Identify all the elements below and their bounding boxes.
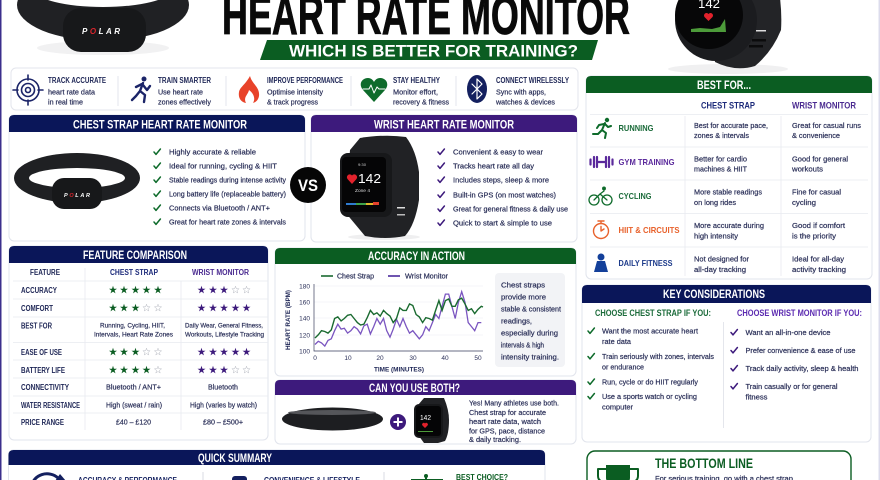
callout: chart note: Chest straps <box>501 280 545 290</box>
callout: chart note: stable & consistent <box>501 304 561 314</box>
column: choose chest strap: rate data <box>602 337 632 346</box>
column: choose wrist monitor: Want an all-in-one device <box>746 328 830 337</box>
list: wrist monitor features: Tracks heart rate all day <box>453 162 534 170</box>
list: wrist monitor features: Convenient & easy to wear <box>453 148 544 156</box>
image: wrist watch: 142 <box>358 171 381 186</box>
benefit: stay healthy: Monitor effort, <box>393 88 438 96</box>
image: chest strap: P O LAR <box>64 193 90 199</box>
image: strap <box>282 408 383 430</box>
benefit: track accurate: TRACK ACCURATE <box>48 76 107 85</box>
image: small watch: 142 <box>420 413 431 422</box>
row: connectivity: Bluetooth / ANT+ <box>106 382 161 392</box>
column: choose chest strap: Use a sports watch or cycling <box>602 392 697 401</box>
row: gym training: machines & HIIT <box>694 164 747 174</box>
icon: runner <box>132 76 150 102</box>
icon: runner <box>593 118 611 138</box>
column: choose chest strap: Train seriously with zones, intervals <box>602 352 714 361</box>
list: wrist monitor features <box>438 148 568 228</box>
row: hiit and circuits: HIIT & CIRCUITS <box>618 225 680 235</box>
row: water resistance: High (sweat / rain) <box>106 400 162 410</box>
row: best for: Intervals, Heart Rate Zones <box>94 332 174 338</box>
callout: chart note: intervals & high <box>501 340 544 350</box>
icon: flame <box>239 76 259 103</box>
row: cycling: Fine for casual <box>792 188 841 196</box>
hero image: chest strap: P O LAR <box>82 27 120 36</box>
list: wrist monitor features: Great for general fitness & daily use <box>453 204 568 214</box>
panel: best for <box>586 76 872 279</box>
image: small watch <box>414 398 449 443</box>
line chart: heart rate over time: HEART RATE (BPM) <box>285 290 292 350</box>
row: hiit and circuits: high intensity <box>694 232 738 240</box>
icon: person <box>594 254 608 272</box>
table header: CHEST STRAP <box>110 268 159 277</box>
row: running: Great for casual runs <box>792 121 861 130</box>
benefit: connect wirelessly: watches & devices <box>495 98 555 106</box>
panel: wrist monitor: WRIST HEART RATE MONITOR <box>374 117 514 131</box>
icon: trophy <box>598 465 638 480</box>
benefit: track accurate <box>13 75 107 106</box>
row: running: Best for accurate pace, <box>694 121 768 130</box>
line chart: heart rate over time <box>285 284 483 374</box>
benefit: stay healthy: STAY HEALTHY <box>393 76 441 85</box>
line chart: heart rate over time: 120 <box>299 332 310 340</box>
row: comfort <box>21 304 250 313</box>
benefit: train smarter: TRAIN SMARTER <box>158 76 211 85</box>
row: gym training: Good for general <box>792 154 848 164</box>
list: wrist monitor features: Quick to start & simple to use <box>453 218 552 228</box>
icon: bluetooth <box>467 75 487 103</box>
row: hiit and circuits: Good if comfort <box>792 221 845 230</box>
row: daily fitness: Ideal for all-day <box>792 254 844 264</box>
list: wrist monitor features: Built-in GPS (on most watches) <box>453 190 556 200</box>
line chart: heart rate over time: 140 <box>299 316 310 322</box>
column headers: WRIST MONITOR <box>792 100 856 112</box>
row: running: zones & intervals <box>694 131 749 140</box>
panel: the bottom line: THE BOTTOM LINE <box>655 455 753 471</box>
column: choose wrist monitor: fitness <box>746 392 768 402</box>
line chart: heart rate over time: 180 <box>299 284 310 290</box>
list: chest strap features: Ideal for running, cycling & HIIT <box>169 162 278 170</box>
row: daily fitness <box>594 254 846 274</box>
benefit: track accurate: in real time <box>48 98 83 106</box>
panel: feature comparison: FEATURE COMPARISON <box>83 248 187 262</box>
panel: wrist monitor <box>311 115 577 242</box>
row: accuracy <box>21 286 250 295</box>
row: water resistance: High (varies by watch) <box>190 400 257 410</box>
text: use both: Chest strap for accurate <box>469 408 546 417</box>
benefit: connect wirelessly: Sync with apps, <box>496 88 546 96</box>
image: chest strap <box>14 153 140 209</box>
benefit: train smarter: Use heart rate <box>158 88 203 96</box>
row: daily fitness: activity tracking <box>792 265 846 274</box>
row: running <box>593 118 861 140</box>
badge: VS <box>290 167 326 203</box>
list: wrist monitor features: Includes steps, sleep & more <box>453 176 549 184</box>
row: ease of use <box>21 348 250 357</box>
benefit: improve performance: & track progress <box>267 98 318 106</box>
table header <box>30 268 249 277</box>
column: choose chest strap: Run, cycle or do HIIT regularly <box>602 378 698 386</box>
panel: chest strap <box>9 115 305 241</box>
text: use both: for GPS, pace, distance <box>469 426 545 436</box>
row: battery life <box>21 366 250 375</box>
benefit: track accurate: heart rate data <box>48 88 96 96</box>
benefit: stay healthy: recovery & fitness <box>393 98 449 106</box>
icon: stopwatch <box>594 221 608 238</box>
row: price range: £80 – £500+ <box>203 418 243 426</box>
row: cycling: More stable readings <box>694 188 762 196</box>
panel: accuracy in action: ACCURACY IN ACTION <box>368 249 465 263</box>
row: battery life: BATTERY LIFE <box>21 366 66 375</box>
benefits strip <box>11 68 578 110</box>
text: use both <box>469 398 559 444</box>
subtitle banner: WHICH IS BETTER FOR TRAINING? <box>289 42 578 60</box>
text: use both: Yes! Many athletes use both. <box>469 398 559 408</box>
row: gym training <box>590 154 848 174</box>
text: use both: & daily tracking. <box>469 435 521 444</box>
column: choose chest strap <box>588 308 714 412</box>
badge: VS: VS <box>298 176 318 195</box>
row: best for: Running, Cycling, HIIT, <box>100 322 165 330</box>
column: choose chest strap: CHOOSE CHEST STRAP IF YOU: <box>595 308 711 318</box>
line chart: heart rate over time: 50 <box>474 355 482 362</box>
row: daily fitness: all-day tracking <box>694 265 746 274</box>
callout: chart note: especially during <box>501 328 558 338</box>
benefit: improve performance: IMPROVE PERFORMANCE <box>267 76 343 85</box>
panel: the bottom line <box>587 451 851 480</box>
line chart: heart rate over time: 0 <box>313 355 317 362</box>
image: wrist watch: Zone 4 <box>355 188 371 193</box>
table header: FEATURE <box>30 268 61 277</box>
row: running: & convenience <box>792 131 840 140</box>
summary: convenience and lifestyle <box>232 476 361 480</box>
icon: dumbbell <box>590 157 612 167</box>
panel: can you use both <box>275 380 576 444</box>
panel: quick summary <box>8 450 545 480</box>
list: chest strap features: Great for heart rate zones & intervals <box>169 218 286 226</box>
row: connectivity: CONNECTIVITY <box>21 383 70 392</box>
row: comfort: COMFORT <box>21 304 53 313</box>
benefit: stay healthy <box>361 76 449 106</box>
callout: chart note <box>495 273 565 367</box>
column: choose chest strap: computer <box>602 402 634 412</box>
chart legend <box>321 272 449 280</box>
line chart: heart rate over time: TIME (MINUTES) <box>374 366 424 374</box>
benefit: improve performance <box>239 76 343 106</box>
row: hiit and circuits <box>594 221 845 240</box>
column: choose wrist monitor: Train casually or for general <box>746 382 838 391</box>
line chart: heart rate over time: 30 <box>409 355 417 362</box>
benefit: connect wirelessly <box>467 75 570 106</box>
row: connectivity <box>21 382 238 392</box>
panel: can you use both: CAN YOU USE BOTH? <box>369 381 460 395</box>
image: wrist watch: 9:30 <box>358 163 366 167</box>
column: choose chest strap: or endurance <box>602 362 644 372</box>
column: choose wrist monitor: Prefer convenience & ease of use <box>746 346 856 355</box>
column: choose wrist monitor <box>731 308 862 402</box>
row: best for: Workouts, Lifestyle Tracking <box>185 332 264 338</box>
callout: chart note: provide more <box>501 292 546 302</box>
row: cycling <box>589 187 841 207</box>
row: gym training: GYM TRAINING <box>618 157 675 167</box>
icon: heart <box>361 78 387 102</box>
row: price range: £40 – £120 <box>116 418 151 426</box>
panel: chest strap: CHEST STRAP HEART RATE MONITOR <box>73 117 247 131</box>
row: price range <box>21 418 243 427</box>
row: cycling: CYCLING <box>618 191 652 201</box>
list: chest strap features: Long battery life (replaceable battery) <box>169 190 286 198</box>
line chart: heart rate over time: 10 <box>344 355 352 362</box>
table header: WRIST MONITOR <box>192 268 249 277</box>
row: gym training: workouts <box>791 164 823 174</box>
column headers: CHEST STRAP <box>701 100 756 112</box>
benefit: train smarter <box>132 76 211 106</box>
column headers <box>701 100 856 112</box>
panel: quick summary: QUICK SUMMARY <box>198 451 272 465</box>
row: best for: BEST FOR <box>21 322 52 330</box>
row: water resistance <box>21 400 257 410</box>
line chart: heart rate over time: 20 <box>376 355 384 362</box>
summary: best choice <box>411 473 508 480</box>
benefit: connect wirelessly: CONNECT WIRELESSLY <box>496 76 570 85</box>
line chart: heart rate over time: 100 <box>299 348 310 356</box>
list: chest strap features: Highly accurate & reliable <box>169 148 256 156</box>
panel: key considerations <box>582 285 871 442</box>
hero image: wrist watch <box>668 0 788 74</box>
row: gym training: Better for cardio <box>694 154 747 164</box>
chart legend: Chest Strap <box>337 272 374 280</box>
panel: feature comparison <box>9 246 268 440</box>
icon: plus <box>390 414 406 430</box>
row: accuracy: ACCURACY <box>21 286 58 295</box>
benefit: train smarter: zones effectively <box>158 98 211 106</box>
row: ease of use: EASE OF USE <box>21 348 63 357</box>
row: best for <box>21 322 264 338</box>
row: cycling: cycling <box>792 198 816 207</box>
line chart: heart rate over time: 160 <box>299 300 310 306</box>
list: chest strap features <box>154 148 286 226</box>
row: cycling: on long rides <box>694 198 736 207</box>
text: use both: heart rate data, watch <box>469 417 541 426</box>
chart legend: Wrist Monitor <box>405 272 449 280</box>
row: connectivity: Bluetooth <box>208 382 238 392</box>
callout: chart note: intensity training. <box>501 352 559 362</box>
column: choose wrist monitor: Track daily activity, sleep & health <box>746 364 858 373</box>
row: daily fitness: Not designed for <box>694 254 750 264</box>
row: water resistance: WATER RESISTANCE <box>21 401 80 410</box>
panel: key considerations: KEY CONSIDERATIONS <box>663 287 765 301</box>
benefit: improve performance: Optimise intensity <box>267 88 323 96</box>
row: hiit and circuits: More accurate during <box>694 221 764 230</box>
list: chest strap features: Connects via Bluetooth / ANT+ <box>169 204 270 212</box>
hero image: chest strap <box>17 0 189 55</box>
panel: accuracy in action <box>275 248 576 376</box>
list: chest strap features: Stable readings during intense activity <box>169 176 286 184</box>
icon: target <box>13 75 43 105</box>
column: choose chest strap: Want the most accurate heart <box>602 326 698 336</box>
image: wrist watch <box>340 136 420 240</box>
icon: cyclist <box>589 187 612 205</box>
row: running: RUNNING <box>618 123 654 133</box>
row: daily fitness: DAILY FITNESS <box>618 258 673 268</box>
row: best for: Daily Wear, General Fitness, <box>185 322 263 330</box>
row: price range: PRICE RANGE <box>21 418 65 427</box>
row: hiit and circuits: is the priority <box>792 232 836 240</box>
line chart: heart rate over time: 40 <box>441 355 449 362</box>
callout: chart note: readings, <box>501 316 532 326</box>
summary: accuracy and performance <box>32 474 178 480</box>
panel: best for: BEST FOR... <box>697 78 751 92</box>
